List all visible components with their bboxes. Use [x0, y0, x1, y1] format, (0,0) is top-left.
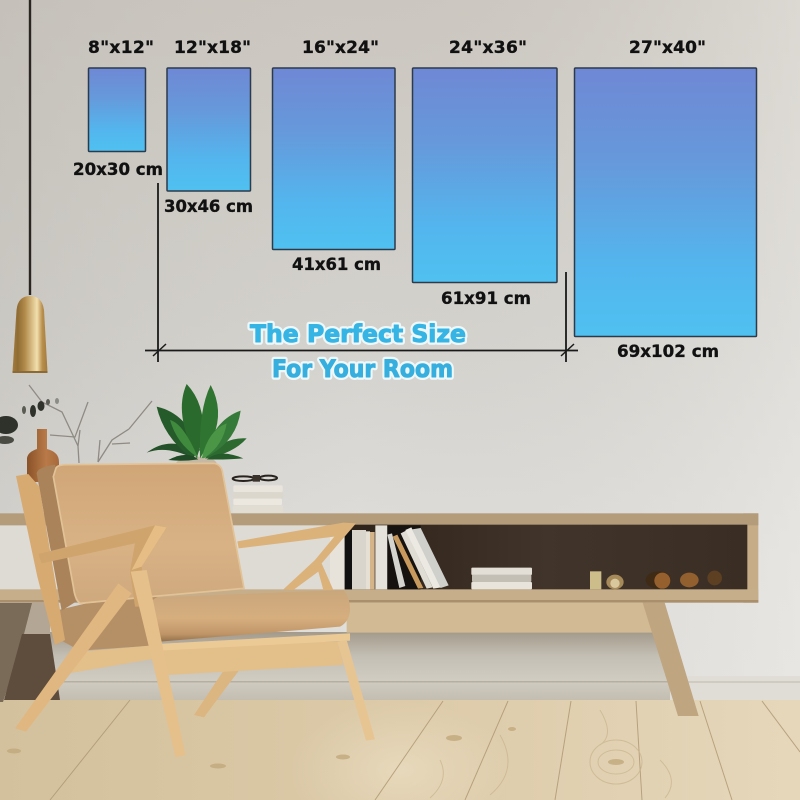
dimension line	[145, 183, 578, 362]
inch labels: 27"x40"	[629, 38, 706, 58]
dark foliage	[0, 398, 59, 444]
pendant lamp	[12, 0, 48, 373]
sideboard	[0, 513, 758, 716]
upright books	[330, 525, 421, 589]
far front leg	[337, 640, 375, 741]
baseboard	[0, 632, 800, 701]
armchair	[15, 463, 375, 757]
copper vase	[27, 429, 59, 482]
art: 16x24 frame	[272, 68, 395, 250]
title: For Your Room	[272, 355, 453, 383]
floor	[0, 700, 800, 800]
centimetre labels: 20x30 cm	[73, 160, 163, 180]
title	[250, 320, 466, 383]
art: 24x36 frame	[412, 68, 557, 282]
title: The Perfect Size	[250, 320, 466, 348]
inch labels: 16"x24"	[302, 38, 379, 58]
inch labels: 12"x18"	[174, 38, 251, 58]
back upright	[16, 474, 65, 645]
centimetre labels	[73, 160, 719, 362]
inch labels	[88, 38, 706, 58]
leg	[643, 603, 699, 716]
potted plant	[147, 384, 247, 463]
white left panel	[0, 525, 345, 592]
shelf interior	[345, 525, 747, 590]
leaning books	[387, 527, 449, 589]
main diagonal	[15, 583, 132, 732]
art: 12x18 frame	[167, 68, 250, 191]
title: The Perfect Size	[250, 320, 466, 348]
centimetre labels: 30x46 cm	[164, 197, 253, 217]
stack of books with glasses	[233, 475, 283, 513]
far arm	[237, 523, 356, 590]
sideboard body right end	[743, 513, 758, 603]
inch labels: 8"x12"	[88, 38, 154, 58]
near front leg	[131, 570, 185, 757]
flat books	[471, 568, 532, 589]
top board	[0, 513, 758, 525]
near arm edge	[132, 525, 167, 570]
art: 8x12 frame	[88, 68, 146, 152]
centimetre labels: 61x91 cm	[441, 289, 531, 309]
near arm	[38, 525, 167, 607]
apron	[347, 603, 655, 633]
ornaments	[590, 571, 722, 589]
back legs	[194, 647, 257, 717]
centimetre labels: 69x102 cm	[617, 342, 719, 362]
branches	[29, 385, 152, 463]
seat rail	[157, 633, 350, 651]
sideboard far-left leg	[0, 603, 60, 702]
seat cushion	[150, 590, 350, 642]
lower body	[58, 587, 160, 651]
title: For Your Room	[272, 355, 453, 383]
shelf lip	[0, 589, 758, 602]
centimetre labels: 41x61 cm	[292, 255, 381, 275]
art: 27x40 frame	[574, 68, 756, 336]
back cushion	[53, 463, 244, 603]
back cushion side	[37, 465, 76, 611]
lower rail plate	[68, 642, 343, 675]
inch labels: 24"x36"	[449, 38, 527, 58]
